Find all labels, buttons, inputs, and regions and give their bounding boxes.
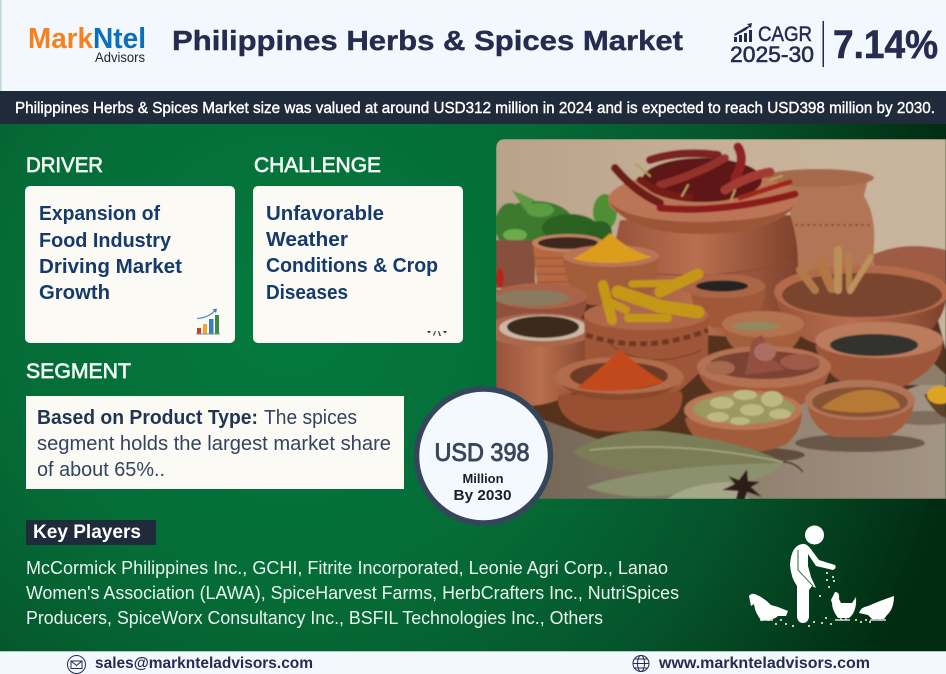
heading: driver: DRIVER <box>26 153 103 177</box>
mustard seed bowl <box>815 342 943 388</box>
driver text: Driving Market <box>39 256 182 278</box>
logo: Mark <box>28 23 94 55</box>
email address: sales@marknteladvisors.com <box>95 655 313 672</box>
logo: Advisors <box>95 49 145 65</box>
footer <box>0 651 946 674</box>
segment text: The spices <box>264 407 357 429</box>
driver text: Food Industry <box>39 230 172 252</box>
back right bowl <box>872 245 946 284</box>
heading: challenge: CHALLENGE <box>254 153 381 177</box>
bay leaves <box>572 431 783 472</box>
star anise <box>722 469 762 499</box>
challenge text <box>266 203 438 304</box>
icon: CAGR growth chart <box>734 23 752 42</box>
logo: Ntel <box>93 23 146 55</box>
key players heading <box>26 520 156 545</box>
panel: segment <box>26 359 404 489</box>
challenge text: Conditions & Crop <box>266 255 438 277</box>
market value circle: By 2030 <box>454 487 512 504</box>
key players list <box>26 557 679 628</box>
panel: challenge <box>253 153 463 343</box>
CAGR label <box>730 23 814 67</box>
segment text <box>37 407 391 481</box>
key players <box>26 520 679 628</box>
star anise pot <box>496 340 586 407</box>
segment text: of about 65%.. <box>37 459 165 481</box>
market value circle <box>416 389 550 523</box>
driver text <box>39 203 182 304</box>
cardamom bowl <box>685 412 802 452</box>
segment text: Based on Product Type: <box>37 407 258 429</box>
large chili pot <box>613 215 798 340</box>
driver text: Expansion of <box>39 203 160 225</box>
icon: farmer feeding chickens <box>749 526 894 627</box>
left back pot <box>496 240 535 288</box>
turmeric roots <box>603 274 698 320</box>
CAGR label: CAGR <box>758 23 812 46</box>
right jar <box>786 182 875 272</box>
cumin bowl <box>496 300 587 320</box>
website address: www.marknteladvisors.com <box>658 655 870 672</box>
falling feed <box>775 572 871 627</box>
market value circle: USD 398 <box>434 439 530 467</box>
market value circle: Million <box>462 472 504 486</box>
icon: email <box>68 656 86 674</box>
panel: driver <box>25 153 235 343</box>
cinnamon bowl <box>776 300 946 344</box>
summary band <box>0 91 946 124</box>
driver text: Growth <box>39 282 110 304</box>
header <box>0 0 946 91</box>
dried red chilies <box>615 147 795 209</box>
key players heading: Key Players <box>33 522 141 543</box>
seed bowl <box>726 332 801 349</box>
shadow mass between bowls <box>496 290 946 440</box>
heading: segment: SEGMENT <box>26 359 131 383</box>
CAGR value: 7.14% <box>833 23 938 67</box>
key players list: Women's Association (LAWA), SpiceHarvest Farms, HerbCrafters Inc., NutriSpices <box>26 582 679 603</box>
black pepper bowl <box>690 286 766 328</box>
challenge text: Unfavorable <box>266 203 384 225</box>
key players list: McCormick Philippines Inc., GCHI, Fitrite Incorporated, Leonie Agri Corp., Lanao <box>26 557 668 578</box>
summary band: Philippines Herbs & Spices Market size was valued at around USD312 million in 2024 and is expected to reach USD398 million by 2030. <box>15 100 935 117</box>
red flakes bowl <box>698 372 830 406</box>
icon: cropped weather marks <box>427 331 447 336</box>
photo: clay bowls of herbs and spices <box>485 139 946 499</box>
challenge text: Weather <box>266 229 348 251</box>
logo <box>28 23 146 65</box>
chili powder bowl <box>558 392 682 432</box>
chicken left <box>749 594 788 620</box>
icon: growth bar chart <box>196 308 220 334</box>
stacked pot <box>532 246 570 287</box>
turmeric side bowl <box>924 385 946 418</box>
turmeric powder bowl <box>563 260 658 305</box>
chicken right <box>859 596 894 619</box>
chicken middle <box>831 592 856 618</box>
title: Philippines Herbs & Spices Market <box>172 25 683 56</box>
spice powder bowl <box>807 404 914 438</box>
green background <box>0 124 946 652</box>
segment text: segment holds the largest market share <box>37 433 391 455</box>
key players list: Producers, SpiceWorx Consultancy Inc., BSFIL Technologies Inc., Others <box>26 607 603 628</box>
icon: globe <box>633 656 649 672</box>
challenge text: Diseases <box>266 282 348 304</box>
CAGR label: 2025-30 <box>730 42 814 67</box>
turmeric roots pot <box>584 312 708 395</box>
herbs <box>495 190 617 247</box>
